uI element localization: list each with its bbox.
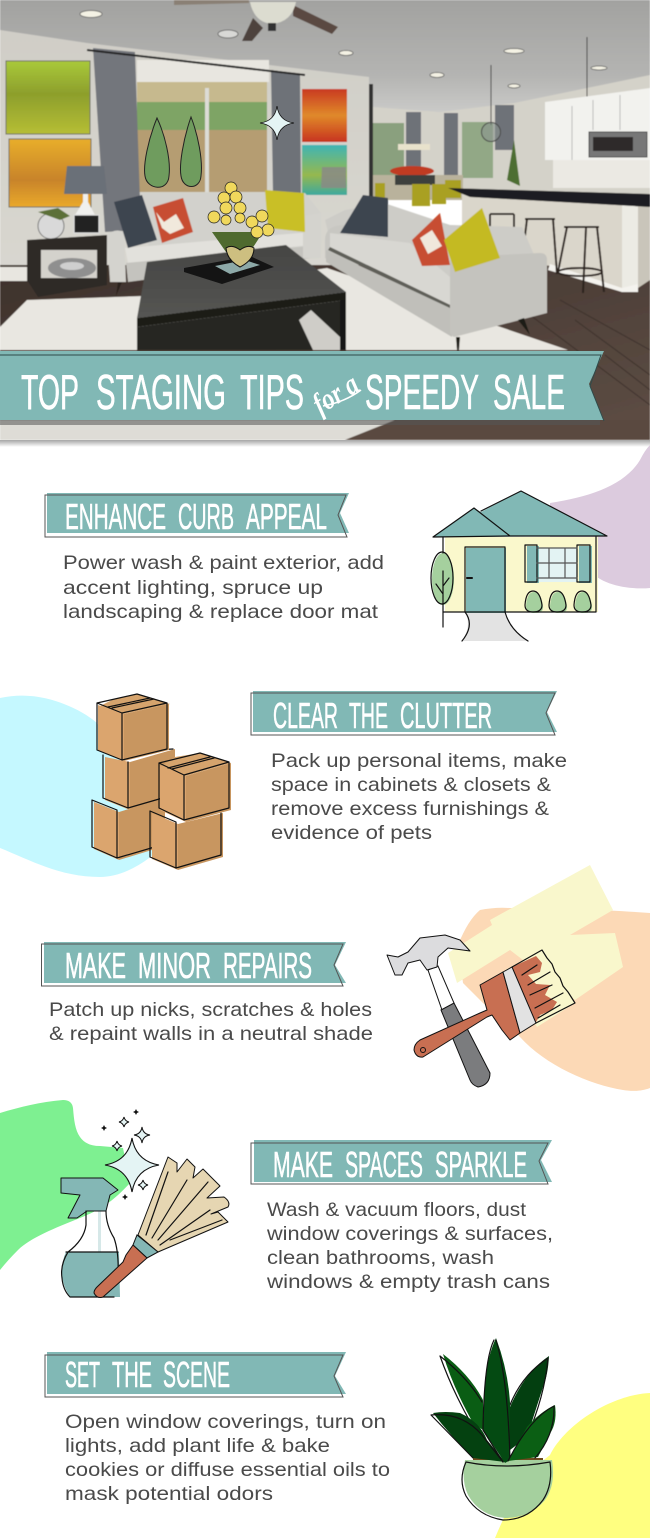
blob: cyan [0,696,170,877]
icon: stacked boxes [92,694,231,870]
wood plank lines [450,300,650,425]
heading: SCENE [163,1354,230,1395]
heading: SPACES [345,1144,423,1185]
box [97,694,170,761]
body text: Power wash & paint exterior, add [63,552,384,574]
body text: mask potential odors [65,1483,273,1505]
title text: TOP [21,366,79,420]
body text: windows & empty trash cans [266,1271,550,1293]
ribbon [45,493,349,537]
icon: spray bottle [61,1178,120,1297]
blob: peach [458,908,650,1091]
left baseboard [0,267,27,281]
body text: clean bathrooms, wash [267,1247,494,1269]
curtains [93,48,141,232]
ribbon [251,691,557,735]
heading: MAKE [273,1144,333,1185]
coffee table [137,245,346,350]
heading: MINOR [138,945,211,986]
icon: potted plant [431,1338,556,1520]
icon: house [431,491,607,641]
floor [0,265,650,440]
lamp and side table [27,166,107,297]
body text: space in cabinets & closets & [271,774,551,796]
heading: THE [349,695,388,736]
heading: APPEAL [246,496,327,537]
body text: cookies or diffuse essential oils to [65,1459,390,1481]
box [92,798,165,860]
heading: CLEAR [273,695,338,736]
ceiling [0,0,650,125]
section: clear the clutter [92,691,567,870]
section: make minor repairs [42,865,623,1087]
box [159,753,231,822]
room scene [0,0,650,440]
panel: hero photo of staged living room [0,0,650,447]
wood floor lower right [345,420,650,440]
photo bottom fade [0,440,650,447]
title text: TIPS [240,366,304,420]
left pillows [114,190,305,248]
body text: Open window coverings, turn on [65,1411,386,1433]
lamp shade on wall [321,167,346,188]
body text: lights, add plant life & bake [65,1435,330,1457]
banner inner outline [0,355,604,421]
ribbon [251,1140,552,1184]
rug [0,268,568,350]
right pillows [340,195,500,272]
bar stools [490,214,604,293]
icon: sparkles [101,1109,159,1200]
heading: THE [112,1354,152,1395]
blob: green [0,1100,130,1270]
icon: feather duster [94,1157,229,1298]
body text: evidence of pets [271,822,432,844]
body text: Pack up personal items, make [271,750,567,772]
dining alcove [369,84,514,206]
title banner [0,351,604,420]
kitchen cabinets [507,88,650,188]
heading: SPARKLE [435,1144,527,1185]
vase with flowers [208,182,274,267]
walls [0,30,369,300]
heading: CLUTTER [400,695,492,736]
body text: window coverings & surfaces, [266,1223,553,1245]
sparkle on curtain [260,106,294,140]
painting orange [9,139,91,207]
heading: CURB [178,496,234,537]
rug below banner [0,420,395,440]
heading: SET [65,1354,100,1395]
section: set the scene [45,1338,556,1520]
section: make spaces sparkle [61,1109,553,1298]
blob: purple [550,445,650,588]
painting green [6,61,90,134]
icon: paint stroke [448,865,623,1000]
box [103,749,175,810]
window [137,60,269,192]
right sofa [325,203,547,350]
ceiling lights [80,10,607,88]
heading: MAKE [65,945,126,986]
tray [184,256,274,284]
blob: yellow [495,1393,650,1538]
title text right: SPEEDY [365,366,479,420]
ribbon [42,942,346,986]
title banner shadow [0,420,600,425]
section: enhance curb appeal [45,491,607,641]
heading: ENHANCE [65,496,166,537]
loveseat [107,193,321,296]
body text: remove excess furnishings & [271,798,549,820]
kitchen island [448,188,650,292]
icon: paint brush [414,950,575,1057]
body text: & repaint walls in a neutral shade [49,1023,373,1045]
box [150,811,223,870]
painting red [302,89,347,142]
body text: Patch up nicks, scratches & holes [49,999,372,1021]
ceiling fan [174,0,338,41]
pendant lights [482,37,600,142]
body text: Wash & vacuum floors, dust [267,1199,527,1221]
body text: landscaping & replace door mat [63,601,379,623]
title script: for a [306,367,365,421]
cypress illustrations [145,117,201,187]
body text: accent lighting, spruce up [63,577,323,599]
title text: STAGING [96,366,226,420]
painting teal [302,145,347,195]
icon: hammer [387,935,490,1087]
title text right: SALE [493,366,565,420]
ribbon [45,1352,346,1397]
books on tray [215,260,260,274]
heading: REPAIRS [223,945,312,986]
curtain rod [87,50,305,75]
